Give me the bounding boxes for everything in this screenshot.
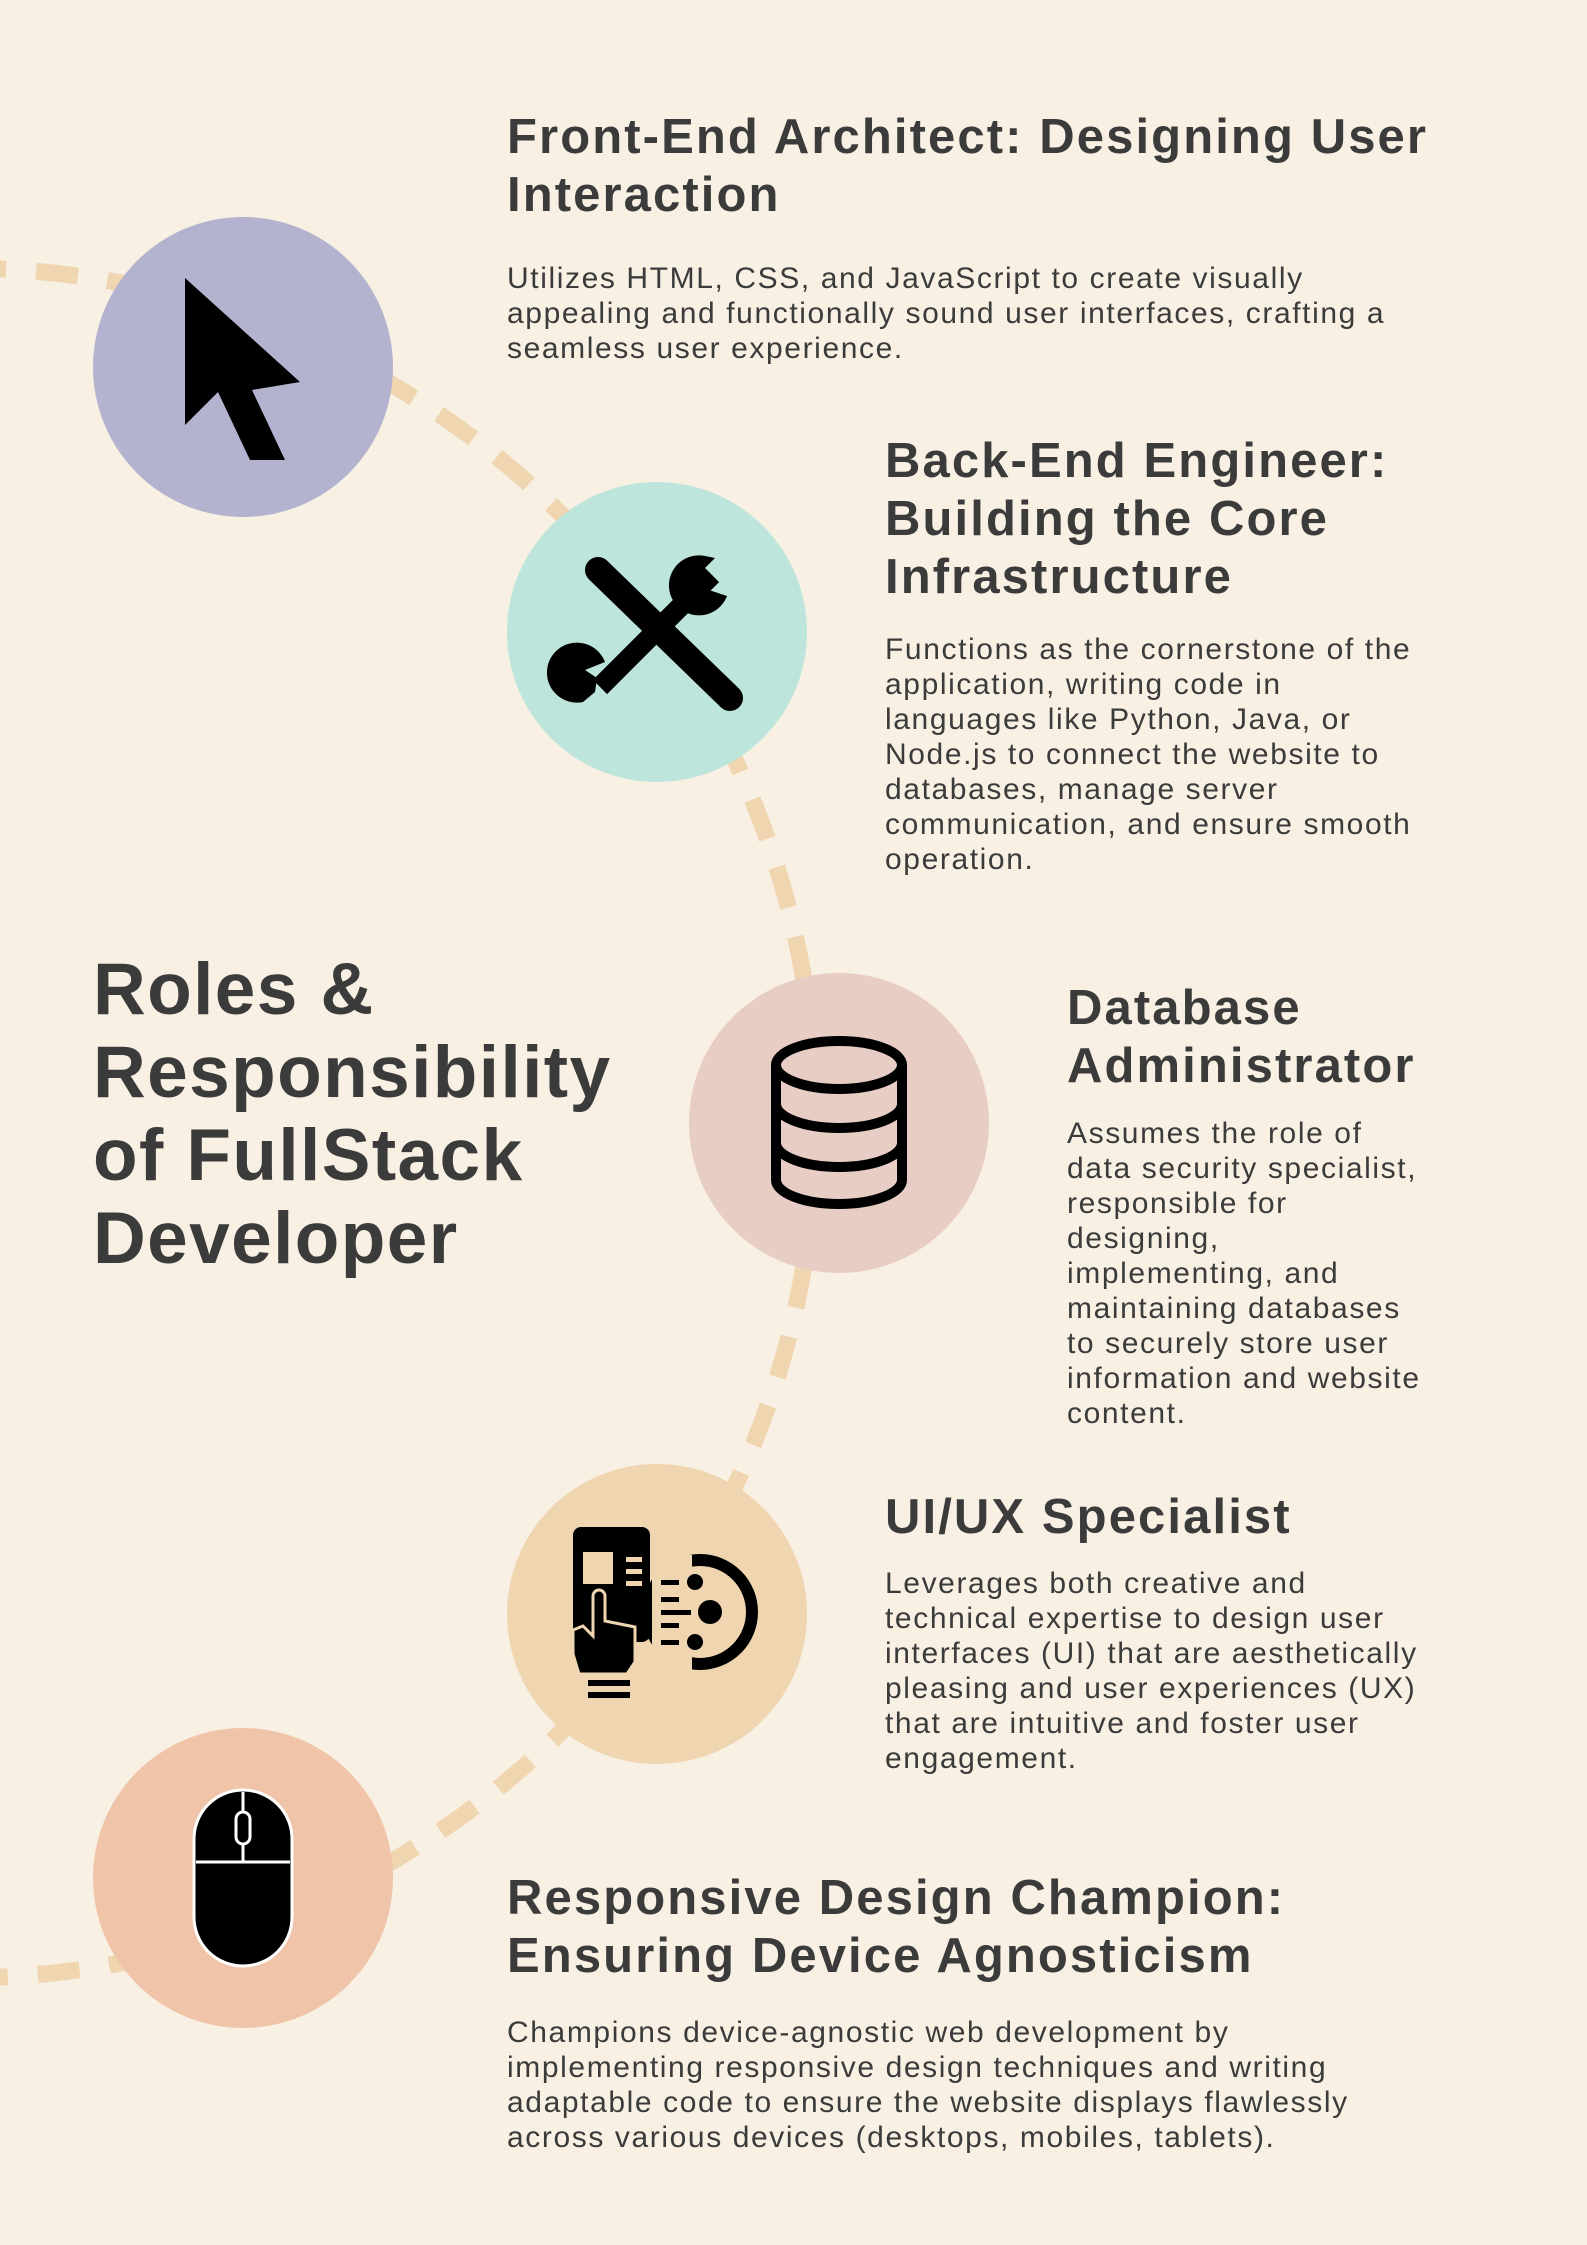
main title: Responsibility: [93, 1032, 612, 1113]
heading: front-end: Interaction: [507, 168, 781, 222]
text: responsive: adaptable code to ensure the website displays flawlessly: [507, 2086, 1349, 2119]
text: database: designing,: [1067, 1222, 1220, 1255]
heading: front-end: Front-End Architect: Designing User: [507, 110, 1428, 164]
text: responsive: [507, 2016, 1349, 2154]
text: responsive: across various devices (desktops, mobiles, tablets).: [507, 2121, 1275, 2154]
heading: front-end: [507, 110, 1428, 222]
text: back-end: application, writing code in: [885, 668, 1282, 701]
text: back-end: languages like Python, Java, or: [885, 703, 1352, 736]
heading: database: Database: [1067, 981, 1302, 1035]
text: database: information and website: [1067, 1362, 1421, 1395]
heading: responsive: Responsive Design Champion:: [507, 1871, 1285, 1925]
text: ui/ux: technical expertise to design user: [885, 1602, 1385, 1635]
heading: responsive: Ensuring Device Agnosticism: [507, 1929, 1254, 1983]
heading: back-end: Back-End Engineer:: [885, 434, 1388, 488]
text: ui/ux: engagement.: [885, 1742, 1078, 1775]
text: front-end: Utilizes HTML, CSS, and JavaScript to create visually: [507, 262, 1304, 295]
text: database: implementing, and: [1067, 1257, 1339, 1290]
text: ui/ux: [885, 1567, 1418, 1775]
main title: of FullStack: [93, 1115, 524, 1196]
main title: Roles &: [93, 949, 375, 1030]
text: ui/ux: pleasing and user experiences (UX): [885, 1672, 1416, 1705]
heading: back-end: [885, 434, 1388, 604]
text: back-end: Node.js to connect the website to: [885, 738, 1380, 771]
main title: [93, 949, 612, 1279]
text: back-end: communication, and ensure smooth: [885, 808, 1411, 841]
text: database: data security specialist,: [1067, 1152, 1417, 1185]
text: front-end: appealing and functionally sound user interfaces, crafting a: [507, 297, 1385, 330]
text: ui/ux: interfaces (UI) that are aesthetically: [885, 1637, 1418, 1670]
text: back-end: [885, 633, 1411, 876]
text: back-end: databases, manage server: [885, 773, 1279, 806]
text: front-end: [507, 262, 1385, 365]
text: database: [1067, 1117, 1421, 1430]
text: database: content.: [1067, 1397, 1187, 1430]
heading: responsive: [507, 1871, 1285, 1983]
text: database: Assumes the role of: [1067, 1117, 1363, 1150]
heading: database: [1067, 981, 1416, 1093]
text: database: maintaining databases: [1067, 1292, 1401, 1325]
text: responsive: implementing responsive design techniques and writing: [507, 2051, 1327, 2084]
text: responsive: Champions device-agnostic web development by: [507, 2016, 1229, 2049]
text: ui/ux: that are intuitive and foster user: [885, 1707, 1360, 1740]
text: database: to securely store user: [1067, 1327, 1389, 1360]
text: ui/ux: Leverages both creative and: [885, 1567, 1307, 1600]
text: back-end: operation.: [885, 843, 1034, 876]
text: front-end: seamless user experience.: [507, 332, 904, 365]
heading: ui/ux: UI/UX Specialist: [885, 1490, 1292, 1544]
heading: back-end: Building the Core: [885, 492, 1329, 546]
heading: back-end: Infrastructure: [885, 550, 1233, 604]
main title: Developer: [93, 1198, 459, 1279]
heading: database: Administrator: [1067, 1039, 1416, 1093]
text: back-end: Functions as the cornerstone of the: [885, 633, 1411, 666]
text: database: responsible for: [1067, 1187, 1288, 1220]
